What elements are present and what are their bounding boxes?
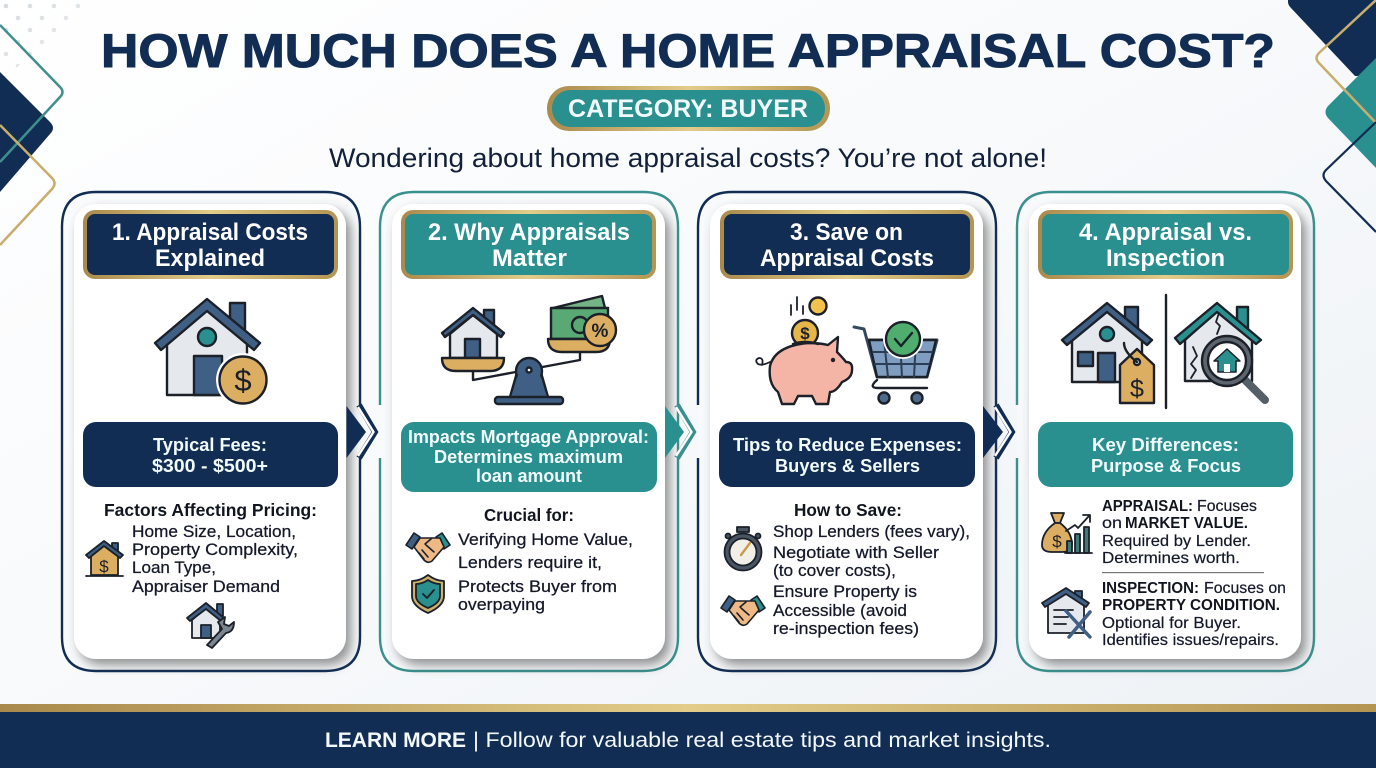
panel 1 heading: 1. Appraisal Costs — [112, 219, 308, 246]
panel 3 heading: Appraisal Costs — [760, 245, 934, 272]
footer text: | Follow for valuable real estate tips and market insights. — [473, 729, 1051, 752]
panel 2 heading — [401, 210, 656, 279]
differences callout — [1038, 422, 1293, 487]
how to save list — [773, 523, 970, 638]
mortgage callout: loan amount — [476, 466, 582, 486]
inspection description: Optional for Buyer. — [1102, 615, 1241, 632]
inspection description: INSPECTION: — [1102, 580, 1199, 597]
panel 4 heading — [1038, 210, 1293, 279]
tips callout: Tips to Reduce Expenses: — [733, 434, 962, 455]
inspection description: PROPERTY CONDITION. — [1102, 597, 1280, 614]
factors list: Loan Type, — [132, 559, 216, 577]
icon: small house with dollar — [86, 541, 123, 576]
category badge: CATEGORY: BUYER — [568, 95, 808, 123]
crucial for list — [458, 531, 633, 614]
footer text: LEARN MORE — [325, 729, 466, 752]
footer band — [0, 704, 1376, 768]
factors list: Appraiser Demand — [132, 578, 280, 596]
appraisal description — [1102, 498, 1257, 567]
how to save heading: How to Save: — [794, 500, 902, 520]
factors list: Home Size, Location, — [132, 523, 296, 541]
differences callout: Key Differences: — [1092, 434, 1239, 455]
how to save list: Shop Lenders (fees vary), — [773, 523, 970, 541]
crucial for list: Lenders require it, — [458, 554, 602, 572]
icon: stopwatch — [724, 527, 762, 570]
panel 2: why appraisals matter — [380, 192, 678, 671]
how to save list: Ensure Property is — [773, 583, 917, 601]
crucial for list: Protects Buyer from — [458, 578, 617, 596]
panel 1: appraisal costs explained — [62, 192, 360, 671]
fee callout: Typical Fees: — [153, 434, 267, 455]
subtitle: Wondering about home appraisal costs? You’re not alone! — [329, 143, 1047, 173]
how to save list: (to cover costs), — [773, 562, 896, 580]
factors list: Property Complexity, — [132, 541, 298, 559]
panel 3 heading — [720, 210, 974, 279]
icon: money bag and growth bars — [1042, 513, 1092, 553]
icon: shield with check — [412, 575, 444, 613]
tips callout: Buyers & Sellers — [775, 455, 920, 476]
mortgage callout: Determines maximum — [434, 447, 623, 467]
icon: scale with house and money — [442, 296, 616, 404]
mortgage callout: Impacts Mortgage Approval: — [408, 427, 649, 447]
how to save list: re-inspection fees) — [773, 620, 919, 638]
mortgage callout — [401, 422, 657, 492]
inspection description — [1102, 580, 1286, 649]
fee callout: $300 - $500+ — [152, 455, 268, 476]
icon: house with dollar coin — [155, 299, 270, 407]
icon: house with dollar coin: $ — [234, 363, 252, 398]
icon: handshake — [721, 596, 765, 625]
icon: money bag and growth bars: $ — [1052, 532, 1062, 551]
appraisal description: APPRAISAL: — [1102, 498, 1193, 515]
appraisal description: Determines worth. — [1102, 550, 1240, 567]
decoration: top-right corner shapes — [1288, 0, 1376, 232]
panel 3: save on appraisal costs — [698, 192, 996, 671]
panel 1 heading: Explained — [155, 245, 265, 272]
appraisal description: Required by Lender. — [1102, 533, 1251, 550]
panel 2 heading: Matter — [492, 245, 567, 272]
icon: house with wrench — [187, 603, 234, 648]
how to save list: Accessible (avoid — [773, 602, 907, 620]
crucial for heading: Crucial for: — [484, 505, 574, 525]
icon: small house with dollar: $ — [99, 557, 109, 576]
crucial for list: overpaying — [458, 596, 545, 614]
panel 4: appraisal vs inspection — [1017, 192, 1314, 671]
factors list — [132, 523, 298, 596]
inspection description: Focuses on — [1204, 580, 1286, 597]
tips callout — [719, 422, 975, 487]
icon: scale with house and money: % — [592, 321, 609, 342]
icon: inspection checklist house and tools — [1042, 588, 1090, 637]
appraisal description: Focuses — [1197, 498, 1257, 515]
title: HOW MUCH DOES A HOME APPRAISAL COST? — [101, 24, 1275, 77]
panel 3 heading: 3. Save on — [790, 219, 903, 246]
icon: piggy bank and shopping cart: $ — [800, 324, 810, 343]
appraisal description: MARKET VALUE. — [1125, 515, 1248, 532]
how to save list: Negotiate with Seller — [773, 544, 940, 562]
arrow: panel 1 to 2 — [346, 405, 375, 458]
panel 4 heading: Inspection — [1106, 245, 1225, 272]
factors heading: Factors Affecting Pricing: — [104, 500, 317, 520]
icon: house with price tag versus cracked house under magnifier — [1062, 295, 1265, 408]
crucial for list: Verifying Home Value, — [458, 531, 633, 549]
appraisal description: on — [1102, 515, 1122, 532]
decoration: top-left corner shapes — [0, 4, 80, 246]
fee callout — [83, 422, 338, 487]
arrow: panel 2 to 3 — [665, 405, 693, 458]
inspection description: Identifies issues/repairs. — [1102, 632, 1279, 649]
category badge — [547, 86, 830, 131]
arrow: panel 3 to 4 — [983, 405, 1012, 458]
icon: house with price tag versus cracked house under magnifier: $ — [1130, 375, 1144, 403]
panel 1 heading — [83, 210, 338, 279]
differences callout: Purpose & Focus — [1091, 455, 1241, 476]
icon: handshake — [406, 533, 450, 562]
icon: piggy bank and shopping cart — [756, 297, 937, 404]
panel 4 heading: 4. Appraisal vs. — [1079, 219, 1252, 246]
panel 2 heading: 2. Why Appraisals — [428, 219, 630, 246]
